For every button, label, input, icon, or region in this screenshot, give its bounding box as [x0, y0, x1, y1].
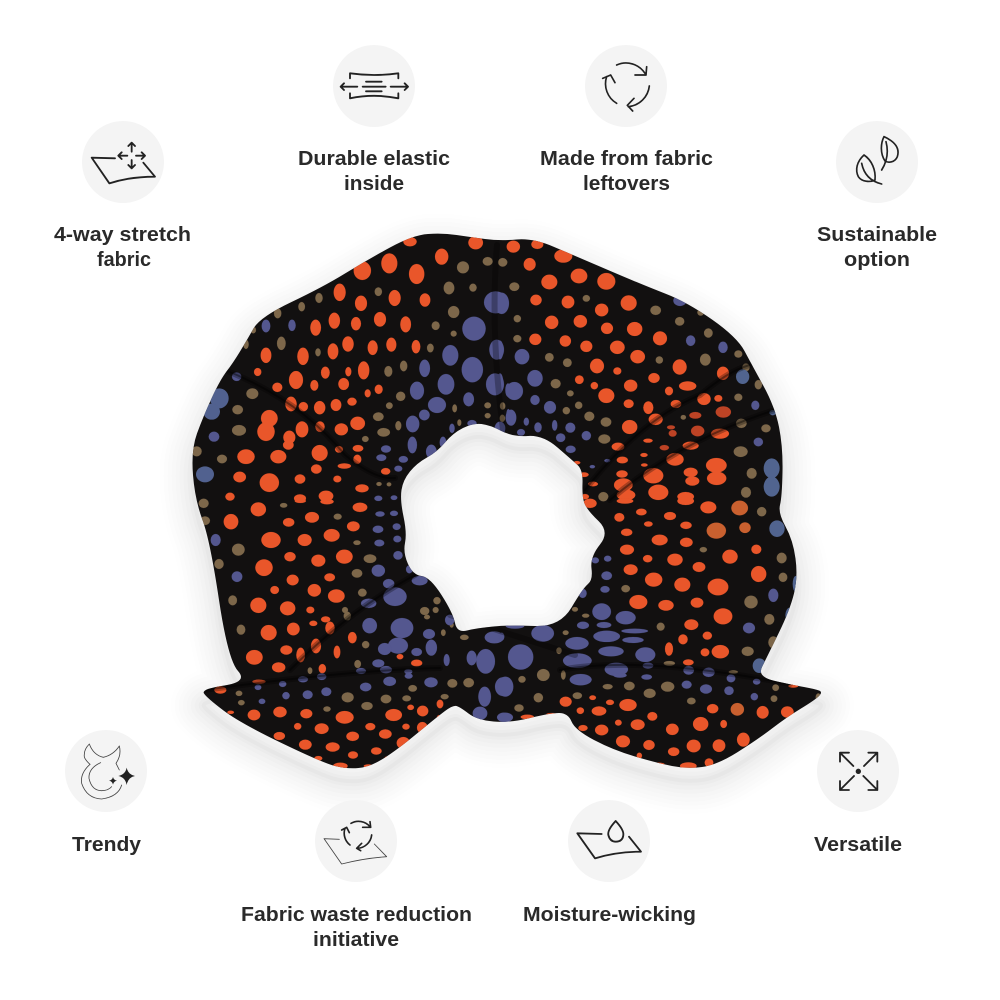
label: 4-way stretch fabric: 4-way stretch	[54, 224, 191, 246]
polka dot pattern	[192, 236, 821, 770]
scrunchie soft shadow	[192, 247, 821, 781]
feature: moisture-wicking	[523, 800, 696, 926]
icon circle: water drop on fabric	[568, 800, 650, 882]
label: 4-way stretch fabric	[54, 224, 191, 271]
icon circle: recycle arrows	[585, 45, 667, 127]
label: sustainable option	[817, 224, 937, 271]
feature: versatile	[814, 730, 902, 856]
dots: lower left quadrant	[199, 499, 510, 769]
feature: sustainable option	[817, 121, 937, 271]
label: fabric waste reduction initiative: Fabric waste reduction	[241, 904, 472, 926]
fabric body silhouette	[192, 234, 821, 768]
feature: trendy	[65, 730, 147, 856]
dots: upper right quadrant	[494, 240, 780, 501]
feature: durable elastic inside	[298, 45, 450, 195]
label: sustainable option: option	[844, 249, 910, 271]
label: moisture-wicking: Moisture-wicking	[523, 904, 696, 926]
label: durable elastic inside: inside	[344, 173, 404, 195]
label: made from fabric leftovers: leftovers	[583, 173, 670, 195]
label: fabric waste reduction initiative: initiative	[313, 929, 399, 951]
label: durable elastic inside	[298, 148, 450, 195]
dots: lower right quadrant	[497, 497, 821, 770]
icon circle: cat scrunchie with sparkles	[65, 730, 147, 812]
feature: 4-way stretch fabric	[54, 121, 191, 271]
icon circle: durable elastic	[333, 45, 415, 127]
feature: made from fabric leftovers	[540, 45, 713, 195]
label: versatile: Versatile	[814, 834, 902, 856]
dots: upper left quadrant	[192, 236, 511, 502]
fabric fold shading	[204, 245, 790, 690]
label: fabric waste reduction initiative	[241, 904, 472, 951]
scrunchie product photo	[192, 234, 821, 770]
icon circle: recycled fabric	[315, 800, 397, 882]
label: durable elastic inside: Durable elastic	[298, 148, 450, 170]
icon circle: 4-way stretch	[82, 121, 164, 203]
feature: fabric waste reduction initiative	[241, 800, 472, 951]
label: trendy: Trendy	[72, 834, 142, 856]
label: sustainable option: Sustainable	[817, 224, 937, 246]
label: 4-way stretch fabric: fabric	[97, 249, 151, 271]
icon circle: outward arrows	[817, 730, 899, 812]
icon circle: leaves	[836, 121, 918, 203]
label: made from fabric leftovers: Made from fabric	[540, 148, 713, 170]
label: made from fabric leftovers	[540, 148, 713, 195]
